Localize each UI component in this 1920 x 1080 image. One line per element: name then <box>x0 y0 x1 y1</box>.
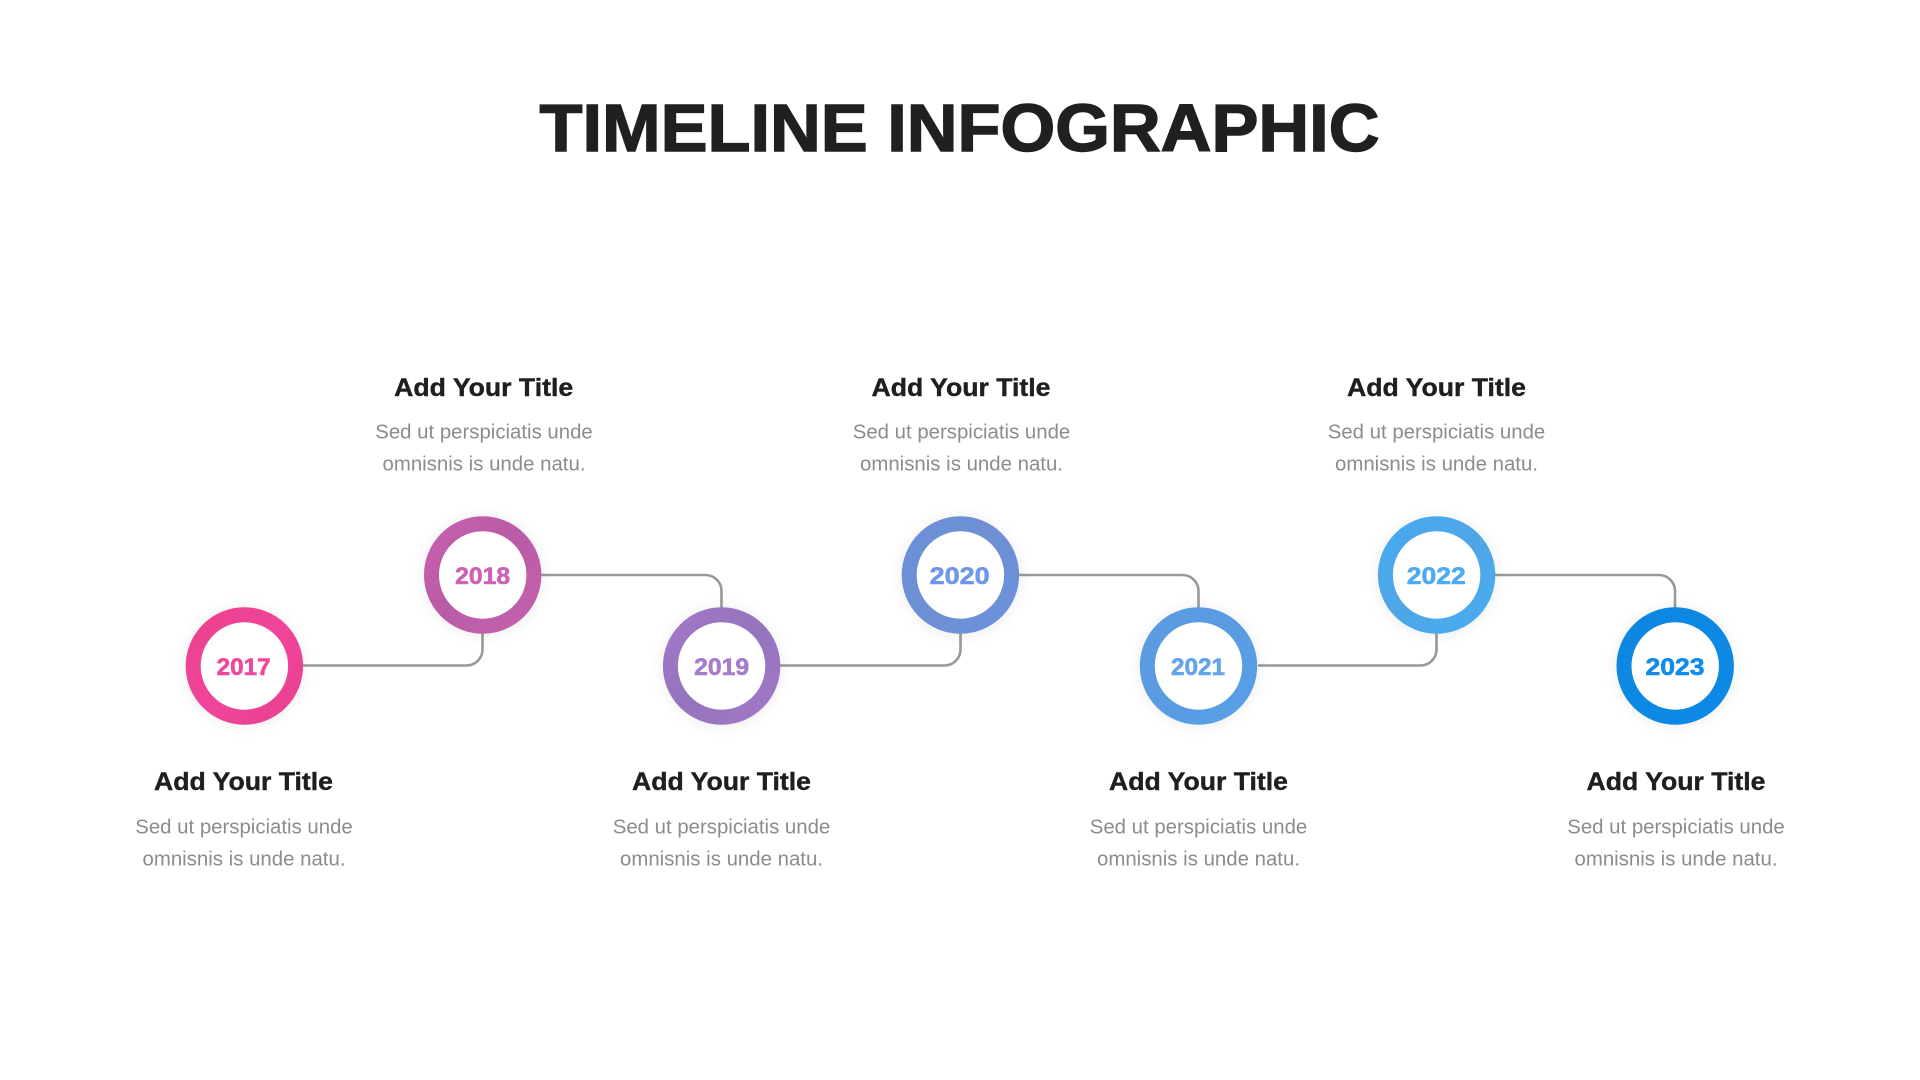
description 2023: omnisnis is unde natu. <box>1574 848 1778 870</box>
year 2018: 2018 <box>455 563 510 590</box>
description 2020: Sed ut perspiciatis unde <box>853 422 1070 444</box>
milestone 2022 <box>1328 374 1545 626</box>
milestone 2021 <box>1090 615 1307 870</box>
year 2020: 2020 <box>930 563 990 590</box>
milestone 2020 <box>853 374 1070 626</box>
description 2020: omnisnis is unde natu. <box>860 454 1063 476</box>
description 2022: omnisnis is unde natu. <box>1335 454 1538 476</box>
description 2023 <box>1567 816 1785 870</box>
heading 2022: Add Your Title <box>1347 374 1526 402</box>
description 2021: omnisnis is unde natu. <box>1097 848 1300 870</box>
description 2022 <box>1328 422 1545 476</box>
ring 2018 <box>432 524 534 626</box>
ring 2023 <box>1624 615 1726 717</box>
year 2022: 2022 <box>1407 563 1466 590</box>
milestone 2017 <box>135 615 353 870</box>
description 2018 <box>375 422 593 476</box>
milestone 2023 <box>1567 615 1785 870</box>
title: TIMELINE INFOGRAPHIC <box>540 91 1380 166</box>
description 2017 <box>135 816 353 870</box>
description 2021: Sed ut perspiciatis unde <box>1090 816 1307 838</box>
heading 2017: Add Your Title <box>154 768 333 796</box>
ring 2021 <box>1147 615 1250 717</box>
heading 2020: Add Your Title <box>872 374 1051 402</box>
description 2022: Sed ut perspiciatis unde <box>1328 422 1545 444</box>
description 2021 <box>1090 816 1307 870</box>
description 2017: omnisnis is unde natu. <box>142 848 346 870</box>
year 2019: 2019 <box>694 654 749 681</box>
ring 2020 <box>909 524 1012 626</box>
ring 2019 <box>670 615 773 717</box>
heading 2021: Add Your Title <box>1109 768 1288 796</box>
description 2020 <box>853 422 1070 476</box>
year 2017: 2017 <box>217 654 271 681</box>
description 2017: Sed ut perspiciatis unde <box>135 816 353 838</box>
milestone 2019 <box>613 615 830 870</box>
description 2018: Sed ut perspiciatis unde <box>375 422 593 444</box>
description 2019 <box>613 816 830 870</box>
heading 2023: Add Your Title <box>1586 768 1766 796</box>
description 2019: Sed ut perspiciatis unde <box>613 816 830 838</box>
ring 2017 <box>193 615 296 717</box>
year 2021: 2021 <box>1171 654 1225 681</box>
ring 2022 <box>1385 524 1488 626</box>
heading 2019: Add Your Title <box>632 768 811 796</box>
description 2018: omnisnis is unde natu. <box>382 454 586 476</box>
year 2023: 2023 <box>1646 654 1704 681</box>
description 2019: omnisnis is unde natu. <box>620 848 823 870</box>
heading 2018: Add Your Title <box>394 374 573 402</box>
description 2023: Sed ut perspiciatis unde <box>1567 816 1785 838</box>
milestone 2018 <box>375 374 593 626</box>
connectors <box>302 575 1675 666</box>
